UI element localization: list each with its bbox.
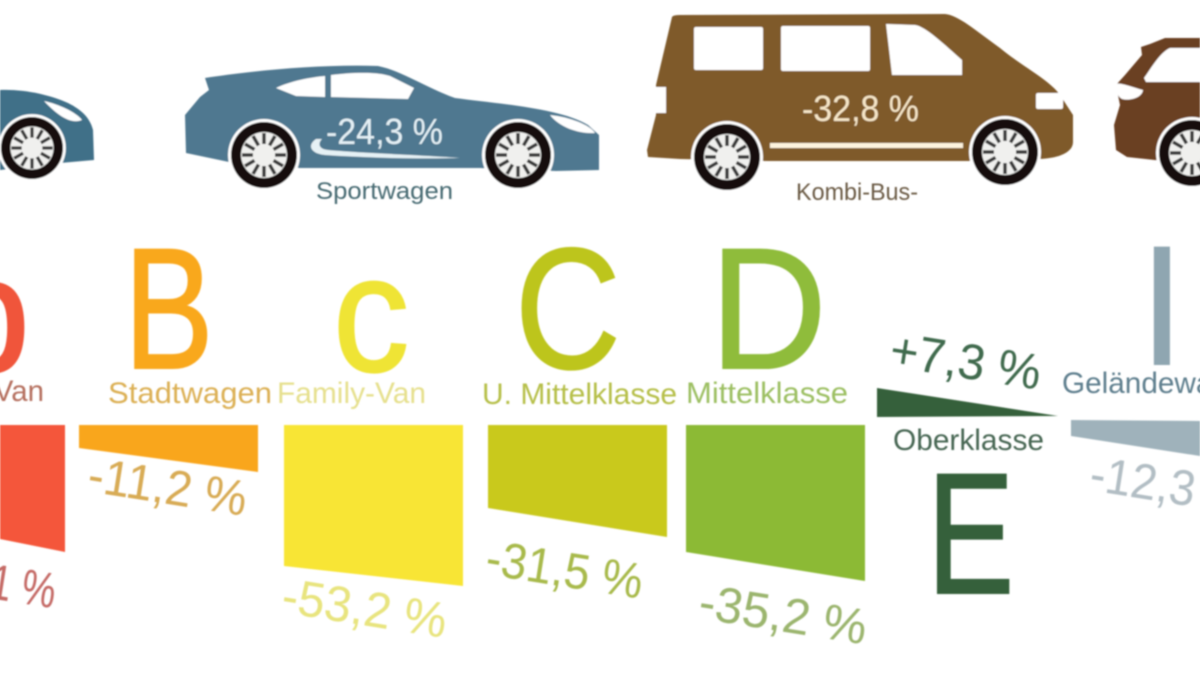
label: U. Mittelklasse: U. Mittelklasse (482, 378, 677, 411)
class letter: E: E (927, 439, 1014, 630)
label: Family-Van: Family-Van (277, 377, 426, 410)
wheel: front (482, 119, 554, 191)
car: small blue hatchback (0, 90, 94, 182)
class letter: I: I (1138, 210, 1186, 402)
class letter: B: B (124, 212, 213, 405)
label: Stadtwagen: Stadtwagen (108, 377, 272, 410)
value: Oberklasse: +7,3 % (886, 322, 1045, 401)
car: Sportwagen (185, 66, 599, 191)
label: Oberklasse: Oberklasse (893, 424, 1044, 457)
value: Mittelklasse: -35,2 % (695, 574, 871, 655)
value: sports car: -24,3 % (326, 111, 443, 152)
class letter: D: D (710, 213, 827, 405)
bar: U. Mittelklasse (488, 425, 667, 537)
car: Kombi-Bus van (647, 14, 1073, 193)
bar: Geländewagen (1071, 420, 1200, 456)
bar: Oberklasse (877, 388, 1058, 417)
wheel: front (969, 116, 1041, 188)
value: Stadtwagen: -11,2 % (84, 447, 251, 527)
bar: Mittelklasse (686, 425, 865, 581)
class letter: C: C (515, 213, 621, 405)
label: Mittelklasse: Mittelklasse (686, 377, 848, 410)
value: van: -32,8 % (802, 88, 919, 129)
label: Sportwagen: Sportwagen (316, 178, 453, 205)
bar: Family-Van (284, 425, 463, 586)
bar: Stadtwagen (79, 425, 258, 472)
wheel: rear (691, 121, 763, 193)
car: brown SUV (1114, 38, 1200, 189)
value: Family-Van: -53,2 % (278, 568, 451, 649)
bar: Mini-Van (0, 425, 65, 552)
label: Kombi-Bus: Kombi-Bus- (796, 179, 918, 206)
wheel: rear (228, 119, 300, 191)
class letter: lowercase c: c (333, 221, 409, 406)
value: U. Mittelklasse: -31,5 % (482, 530, 647, 610)
